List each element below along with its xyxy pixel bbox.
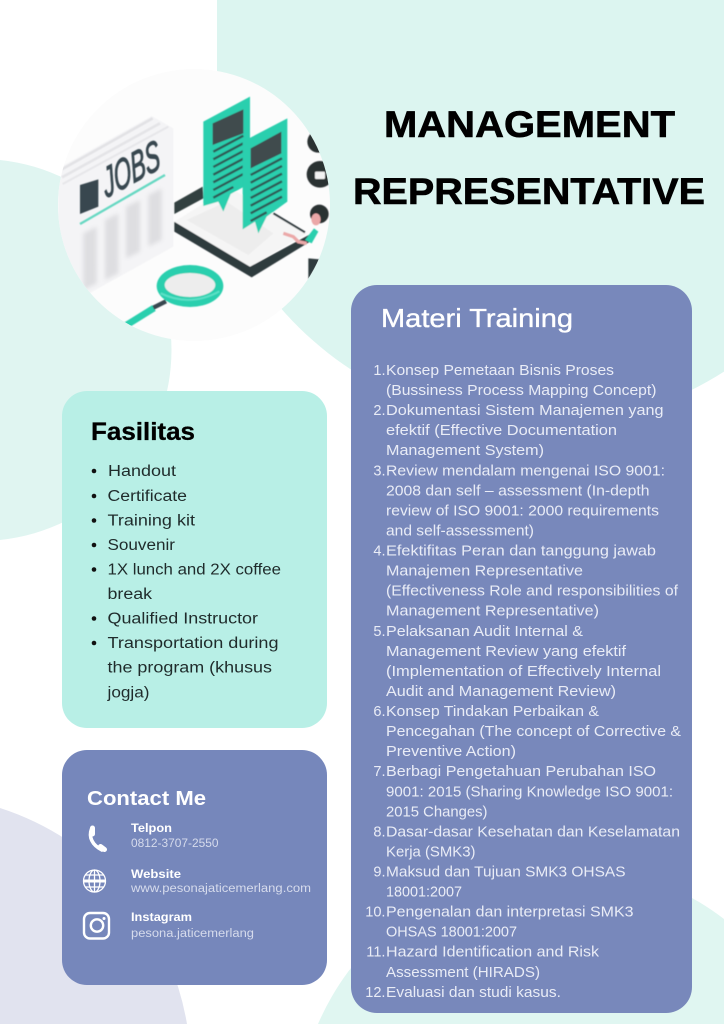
materi list numbers <box>365 363 386 1001</box>
materi list numbers: 7. <box>373 764 386 780</box>
telephone text: 0812-3707-2550 <box>131 838 218 850</box>
materi list text: OHSAS 18001:2007 <box>386 925 517 941</box>
background: bottom right mint shape <box>318 864 724 1024</box>
materi list text: Management System) <box>386 443 544 459</box>
materi list numbers: 4. <box>373 544 386 560</box>
materi list numbers: 9. <box>373 864 386 880</box>
materi list text: 2008 dan self – assessment (In-depth <box>386 483 650 499</box>
panel: materi training <box>351 285 692 1013</box>
fasilitas list: 1X lunch and 2X coffee <box>108 562 281 578</box>
materi list text: (Implementation of Effectively Internal <box>386 664 661 680</box>
fasilitas list: Handout <box>108 463 177 480</box>
materi list text: Management Representative) <box>386 604 599 620</box>
illustration: job search in white circle: JOBS <box>99 132 163 208</box>
materi list text: Pengenalan dan interpretasi SMK3 <box>386 905 634 921</box>
icon: instagram <box>84 913 109 938</box>
materi list text: Review mendalam mengenai ISO 9001: <box>386 463 665 479</box>
materi list text: Management Review yang efektif <box>386 644 627 660</box>
materi list text: Konsep Pemetaan Bisnis Proses <box>386 363 614 379</box>
materi list text: Berbagi Pengetahuan Perubahan ISO <box>386 764 656 780</box>
materi list text: Preventive Action) <box>386 744 516 760</box>
fasilitas list: break <box>108 586 152 603</box>
website text <box>130 869 311 895</box>
panel: contact <box>62 750 327 985</box>
materi list text: Evaluasi dan studi kasus. <box>386 985 561 1001</box>
fasilitas list: jogja) <box>106 684 150 702</box>
background: bottom left lavender shape <box>0 808 187 1024</box>
materi list text: Dasar-dasar Kesehatan dan Keselamatan <box>386 824 680 840</box>
fasilitas list: Training kit <box>108 512 196 530</box>
materi list text: Efektifitas Peran dan tanggung jawab <box>386 544 656 560</box>
materi list text: (Bussiness Process Mapping Concept) <box>386 383 656 399</box>
materi list numbers: 12. <box>365 985 386 1001</box>
instagram text: pesona.jaticemerlang <box>131 928 254 940</box>
fasilitas list: the program (khusus <box>108 660 272 676</box>
materi list numbers: 1. <box>373 363 386 379</box>
materi list text: Hazard Identification and Risk <box>386 945 600 961</box>
website text: www.pesonajaticemerlang.com <box>130 883 311 895</box>
materi list text: Manajemen Representative <box>386 564 583 580</box>
fasilitas list: Souvenir <box>108 537 175 554</box>
materi list text: (Effectiveness Role and responsibilities of <box>386 584 679 600</box>
materi list text: and self-assessment) <box>386 524 534 540</box>
materi heading: Materi Training <box>381 303 573 333</box>
materi list numbers: 5. <box>373 624 386 640</box>
materi list text: Pencegahan (The concept of Corrective & <box>386 724 681 740</box>
materi list text: efektif (Effective Documentation <box>386 423 617 439</box>
title <box>353 104 705 212</box>
materi list numbers: 3. <box>373 463 386 479</box>
materi list text: 2015 Changes) <box>386 804 488 820</box>
illustration: job search in white circle <box>58 69 333 341</box>
materi list text: Dokumentasi Sistem Manajemen yang <box>386 403 664 419</box>
instagram text <box>131 912 254 940</box>
fasilitas list: Certificate <box>108 488 187 505</box>
materi list numbers: 6. <box>373 704 386 720</box>
fasilitas list <box>92 463 281 702</box>
telephone text: Telpon <box>131 823 172 835</box>
website text: Website <box>131 869 181 881</box>
title: REPRESENTATIVE <box>353 171 705 212</box>
background: top right mint shape <box>217 0 724 426</box>
materi list text: Maksud dan Tujuan SMK3 OHSAS <box>386 864 626 880</box>
materi list numbers: 10. <box>365 905 386 921</box>
materi list numbers: 11. <box>366 945 386 961</box>
fasilitas heading: Fasilitas <box>91 418 195 446</box>
contact heading: Contact Me <box>87 787 206 810</box>
panel: fasilitas <box>62 391 327 728</box>
materi list text: Pelaksanan Audit Internal & <box>386 624 583 640</box>
instagram text: Instagram <box>131 912 192 924</box>
fasilitas list: Qualified Instructor <box>108 610 258 628</box>
materi list text: Assessment (HIRADS) <box>386 965 540 981</box>
materi list text: Konsep Tindakan Perbaikan & <box>386 704 599 720</box>
icon: globe <box>84 870 106 892</box>
materi list numbers: 8. <box>373 824 386 840</box>
materi list text: Kerja (SMK3) <box>386 844 476 860</box>
background: left mint shape <box>0 160 171 540</box>
materi list text <box>386 363 681 1001</box>
materi list text: 18001:2007 <box>386 885 462 901</box>
materi list text: 9001: 2015 (Sharing Knowledge ISO 9001: <box>386 784 673 800</box>
materi list numbers: 2. <box>373 403 386 419</box>
icon: telephone <box>90 828 104 850</box>
telephone text <box>131 823 218 850</box>
materi list text: review of ISO 9001: 2000 requirements <box>386 503 659 519</box>
title: MANAGEMENT <box>384 104 675 145</box>
fasilitas list: Transportation during <box>108 635 278 652</box>
materi list text: Audit and Management Review) <box>386 684 616 700</box>
